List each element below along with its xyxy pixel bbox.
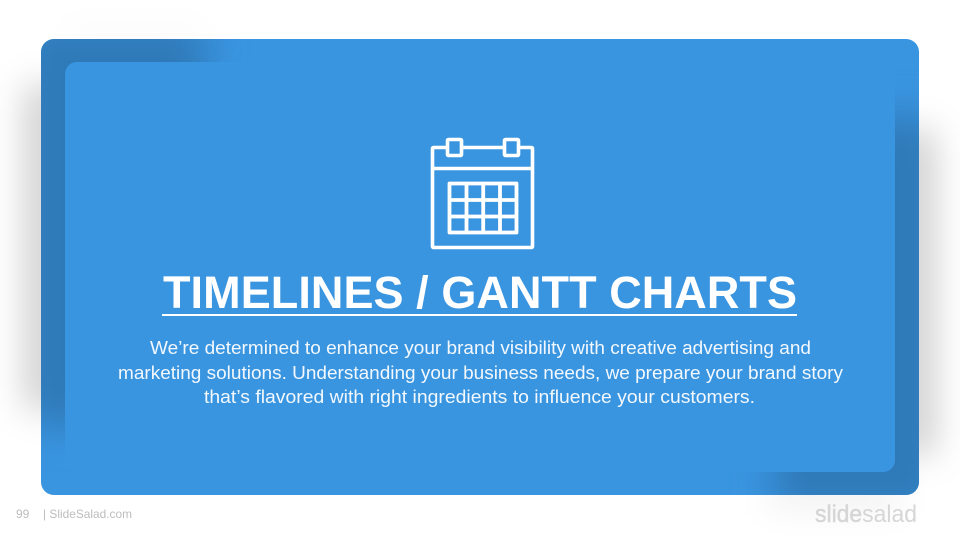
page number: 99 <box>16 507 30 521</box>
logo: slidesalad: slidesalad <box>815 501 917 528</box>
body text: that’s flavored with right ingredients to influence your customers. <box>204 386 755 407</box>
body text: marketing solutions. Understanding your business needs, we prepare your brand story <box>118 362 844 383</box>
body text <box>118 337 844 407</box>
body text: We’re determined to enhance your brand visibility with creative advertising and <box>150 337 811 358</box>
inner card shadow: bottom right <box>775 117 940 512</box>
panel: outer blue card <box>41 39 919 495</box>
icon: calendar <box>432 140 533 248</box>
title: TIMELINES / GANTT CHARTS <box>163 267 797 318</box>
inner card shadow: top left <box>20 22 205 425</box>
panel: inner blue card <box>65 62 895 472</box>
footer site name: | SlideSalad.com <box>43 507 132 521</box>
